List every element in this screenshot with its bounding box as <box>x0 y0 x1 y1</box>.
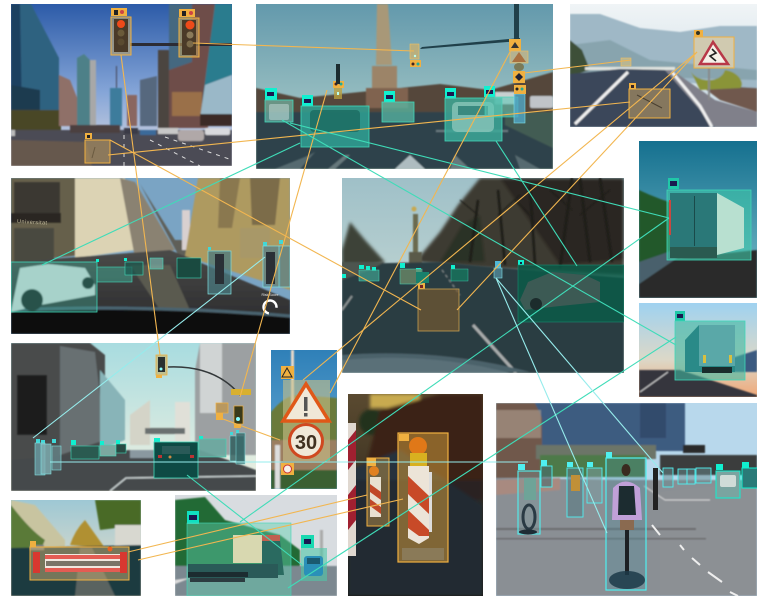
panel: flatbed truck and van <box>175 495 337 596</box>
vehicle detections distant <box>342 263 468 284</box>
traffic light arm <box>168 367 240 395</box>
far sign detection <box>621 58 631 66</box>
connector lines: orange <box>108 43 697 560</box>
pedestrian detection <box>494 261 502 278</box>
panel: residential street with parked cars <box>11 178 290 334</box>
sign detections <box>216 389 251 428</box>
vehicle: large SUV detection <box>518 260 624 322</box>
main cyclist detection <box>606 452 646 590</box>
sign detection box <box>283 380 330 461</box>
road patch detection <box>418 283 459 331</box>
vehicle: flatbed truck detection <box>187 511 291 596</box>
vehicles: parked cars row <box>96 258 201 282</box>
truck detection <box>667 178 751 260</box>
road crack detection <box>629 83 670 118</box>
vehicle: blue van detection <box>301 535 327 581</box>
vehicle: dark car <box>301 95 369 147</box>
large beacon detection <box>398 433 448 562</box>
signal pole and arm <box>420 4 520 49</box>
bend warning sign detection <box>694 30 734 68</box>
panel: truck at sunset <box>639 303 757 397</box>
centre traffic light detection <box>333 64 344 99</box>
pedestrian detection <box>514 94 525 123</box>
sign detections on pole <box>509 39 528 94</box>
pedestrian detections right <box>230 430 245 464</box>
connector lines: light cyan <box>33 257 663 533</box>
vehicle: car ahead <box>154 436 226 478</box>
score gauge overlay: Risk Score <box>262 293 279 297</box>
panel: truck on highway rear view <box>639 141 757 298</box>
vehicle detections <box>71 440 126 459</box>
warning tag <box>281 366 294 379</box>
panel: Victory Column roundabout <box>256 4 553 169</box>
text: shop sign: Universitat <box>17 219 48 227</box>
panel: city street with car and pedestrians <box>11 343 256 491</box>
left traffic light detection <box>111 8 131 55</box>
speed limit tag <box>281 463 294 475</box>
pedestrian detections left <box>35 439 61 475</box>
vehicle: van <box>265 88 293 122</box>
traffic light detection top <box>156 355 167 378</box>
vehicle: grey car <box>382 91 414 122</box>
bare tree trunks <box>460 178 612 268</box>
traffic light detection <box>410 44 421 67</box>
panel: roadworks beacons <box>348 394 483 596</box>
horizontal signal arm <box>130 43 232 46</box>
warning triangle sign <box>283 384 329 421</box>
vehicle: white parked car <box>11 262 97 312</box>
panel: mountain road with bend sign <box>570 4 757 127</box>
panel: construction barrier on street <box>11 500 141 596</box>
barrier detection <box>30 541 129 580</box>
vehicle: white car <box>445 88 502 141</box>
panel: avenue with trees and column <box>342 178 624 373</box>
panel: warning and speed limit signs <box>271 350 337 489</box>
vehicle: far car <box>484 86 518 117</box>
left barrier edge <box>348 423 356 556</box>
cyclist detections <box>518 460 602 534</box>
right traffic light detection <box>179 9 199 57</box>
speed limit sign: 30 <box>295 432 317 454</box>
small beacon detection <box>367 458 389 526</box>
score gauge overlay <box>262 293 279 315</box>
truck detection <box>675 311 745 380</box>
connector lines: teal <box>42 120 676 588</box>
panel: city intersection with traffic lights <box>11 4 232 166</box>
pedestrian detections <box>208 240 290 294</box>
panel: cyclists at intersection <box>496 403 762 596</box>
road markings <box>652 525 738 596</box>
road damage detection <box>85 133 110 163</box>
vehicle and far cyclist detections <box>663 462 762 498</box>
dark bollard <box>653 468 658 510</box>
